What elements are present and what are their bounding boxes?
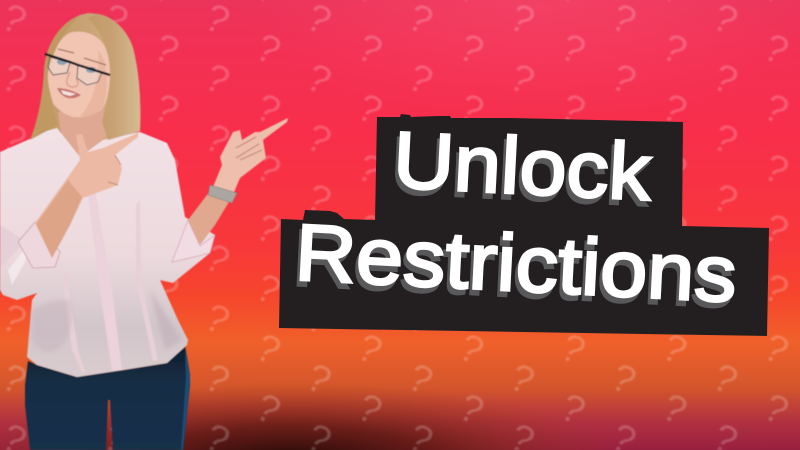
woman pointing [0,13,288,450]
right forearm [188,187,232,245]
left hand finger lines [108,155,121,185]
left cuff [18,222,60,268]
title text shadow: Unlock [388,121,651,223]
shirt seams and shading [0,190,182,372]
hair back [30,13,140,146]
title text shadow: Restrictions [290,213,736,324]
hair left strand [30,15,80,140]
hair right strand [88,14,140,140]
teeth [61,90,76,96]
glasses [48,57,102,85]
face shading [80,50,107,116]
eyes [57,59,96,73]
nose [67,72,78,87]
glasses top frame [45,54,110,75]
shirt body and sleeves [0,128,215,377]
eyebrows [58,49,106,65]
title panel [279,114,769,336]
jeans [25,345,190,450]
face [48,32,110,117]
left forearm and hand [35,133,138,258]
title text shadow [290,121,736,324]
right sleeve cuff [172,220,215,262]
black backdrop [279,114,769,336]
mouth [57,88,81,98]
watch [208,185,237,203]
title text [293,115,739,319]
neck [58,108,106,168]
jeans edge highlight [181,347,190,450]
title text: Restrictions [293,208,739,319]
right hand finger lines [236,137,262,160]
title text: Unlock [391,115,654,217]
forearm shade [36,180,82,258]
right hand [213,118,288,197]
